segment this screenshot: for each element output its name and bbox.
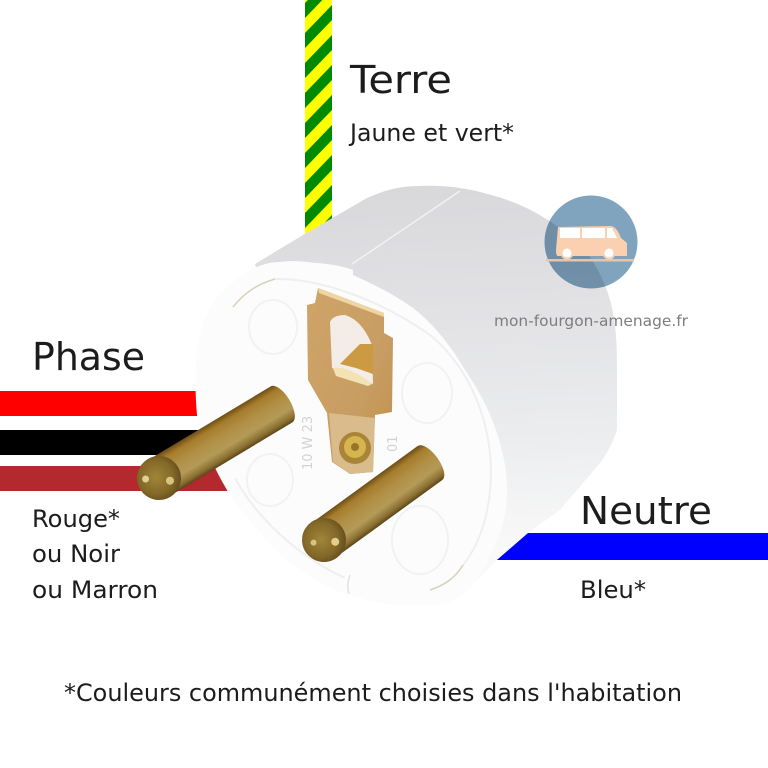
pin: neutral — [293, 440, 450, 571]
label: phase colours: ou Marron — [32, 576, 158, 604]
label: phase colours: ou Noir — [32, 540, 120, 568]
wire: phase brown — [0, 466, 245, 491]
plug seam — [352, 191, 460, 264]
label: Terre: Terre — [349, 58, 452, 102]
pin: phase — [129, 381, 301, 508]
logo disc — [544, 196, 638, 288]
plug front face — [196, 261, 507, 605]
plug — [129, 186, 617, 605]
footnote: *Couleurs communément choisies dans l'habitation — [64, 679, 682, 707]
label: neutral colour: Bleu* — [580, 576, 646, 604]
logo caption: mon-fourgon-amenage.fr — [494, 312, 689, 330]
label: Neutre: Neutre — [580, 489, 712, 533]
moulded text: 10 W 23 — [301, 416, 316, 470]
wire: phase red — [0, 391, 215, 416]
plug rim notch — [348, 575, 350, 594]
plug moulded marks — [247, 300, 452, 574]
plug tan moulding lines — [233, 279, 463, 590]
wire: neutral blue — [480, 533, 768, 560]
label: earth colour: Jaune et vert* — [348, 119, 514, 147]
logo — [544, 196, 638, 288]
wire: phase black — [0, 430, 210, 455]
moulded number: 01 — [386, 435, 401, 452]
brass earth contact — [307, 288, 393, 474]
plug body side — [255, 186, 617, 605]
label: phase colours — [32, 505, 158, 604]
van icon — [556, 226, 627, 258]
label: Phase: Phase — [32, 335, 145, 379]
road line — [546, 259, 634, 262]
rivet — [339, 432, 371, 464]
wire: earth yellow and green — [305, 0, 332, 240]
plug face recessed edge — [235, 279, 491, 578]
label: phase colours: Rouge* — [32, 505, 120, 533]
contact opening — [330, 315, 373, 384]
